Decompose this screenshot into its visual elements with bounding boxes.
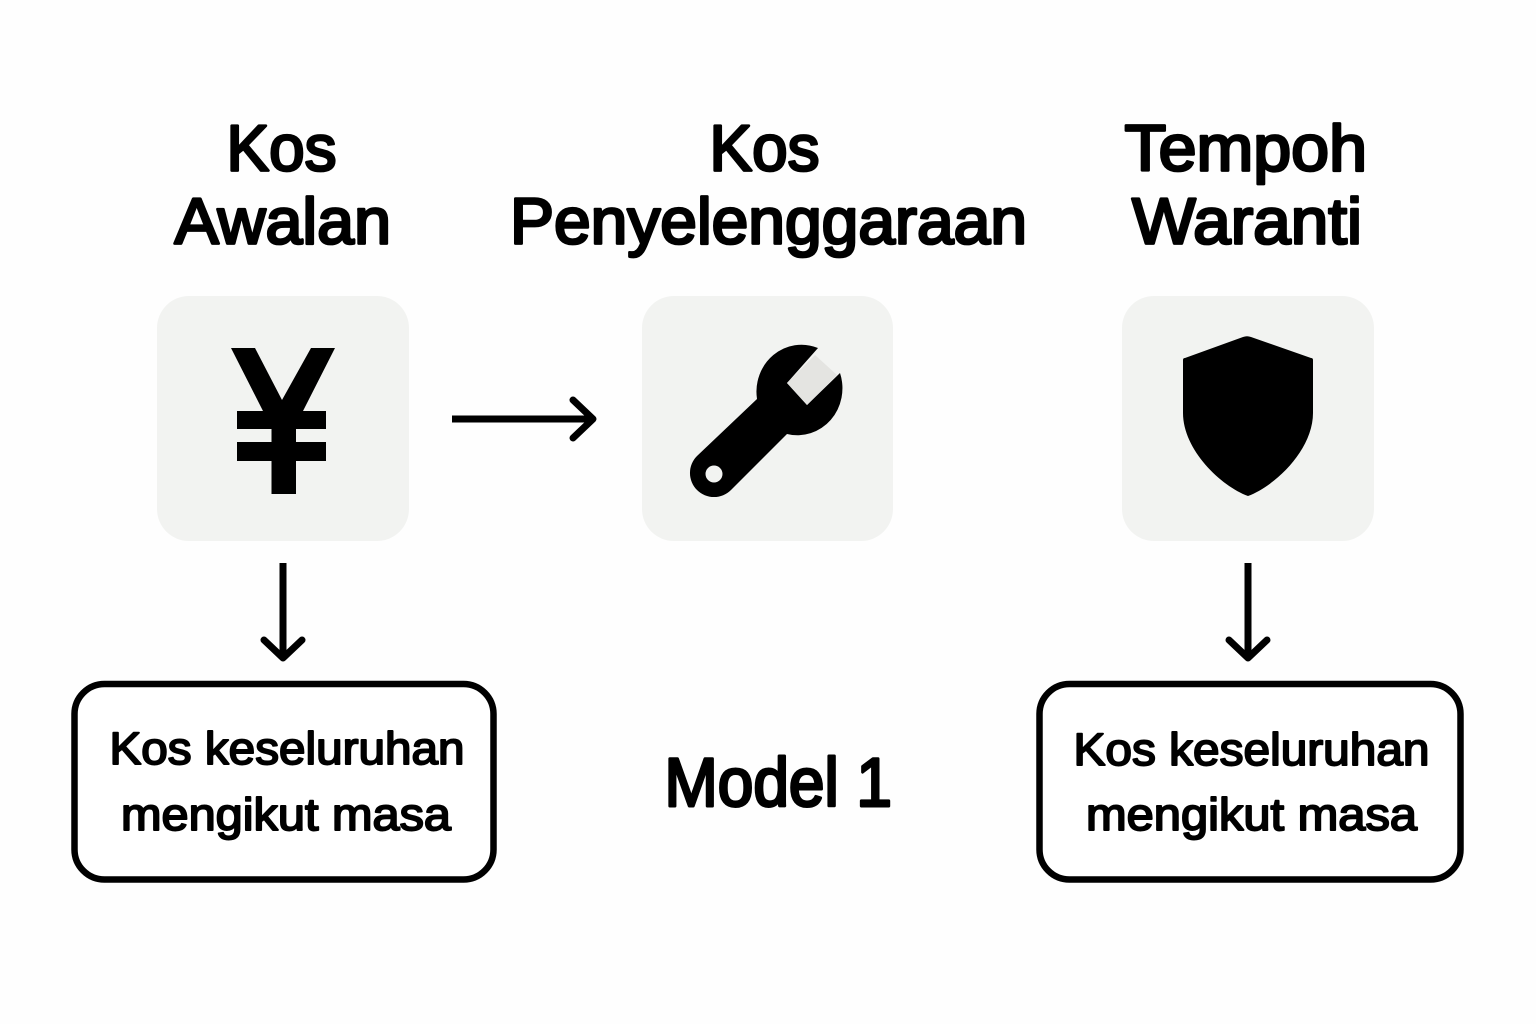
callout: total cost over time, left: mengikut masa (121, 789, 452, 840)
panel: maintenance cost icon (642, 296, 893, 541)
heading: Kos Awalan (174, 112, 391, 258)
icon: shield (1183, 336, 1313, 496)
callout: total cost over time, left (74, 684, 494, 880)
heading: Kos Penyelenggaraan (510, 112, 1027, 258)
heading: Tempoh Waranti: Waranti (1132, 184, 1362, 258)
arrow: initial cost to maintenance cost (452, 400, 593, 438)
panel: initial cost icon (157, 296, 409, 541)
callout: total cost over time, left: Kos keseluruhan (110, 723, 465, 774)
callout: total cost over time, right: mengikut masa (1086, 789, 1418, 840)
icon: wrench (690, 345, 842, 497)
heading: Kos Awalan: Kos (226, 112, 336, 184)
heading: Kos Penyelenggaraan: Penyelenggaraan (510, 184, 1027, 258)
heading: Kos Awalan: Awalan (174, 184, 391, 258)
arrow: initial cost down to total cost (264, 563, 302, 658)
icon: yen sign (231, 348, 335, 494)
arrow: warranty down to total cost (1229, 563, 1267, 658)
label: Model 1: Model 1 (664, 744, 892, 821)
heading: Tempoh Waranti: Tempoh (1124, 112, 1367, 184)
heading: Kos Penyelenggaraan: Kos (710, 112, 820, 184)
callout: total cost over time, right: Kos keseluruhan (1074, 724, 1430, 775)
heading: Tempoh Waranti (1124, 112, 1367, 258)
panel: warranty icon (1122, 296, 1374, 541)
callout: total cost over time, right (1040, 684, 1460, 880)
